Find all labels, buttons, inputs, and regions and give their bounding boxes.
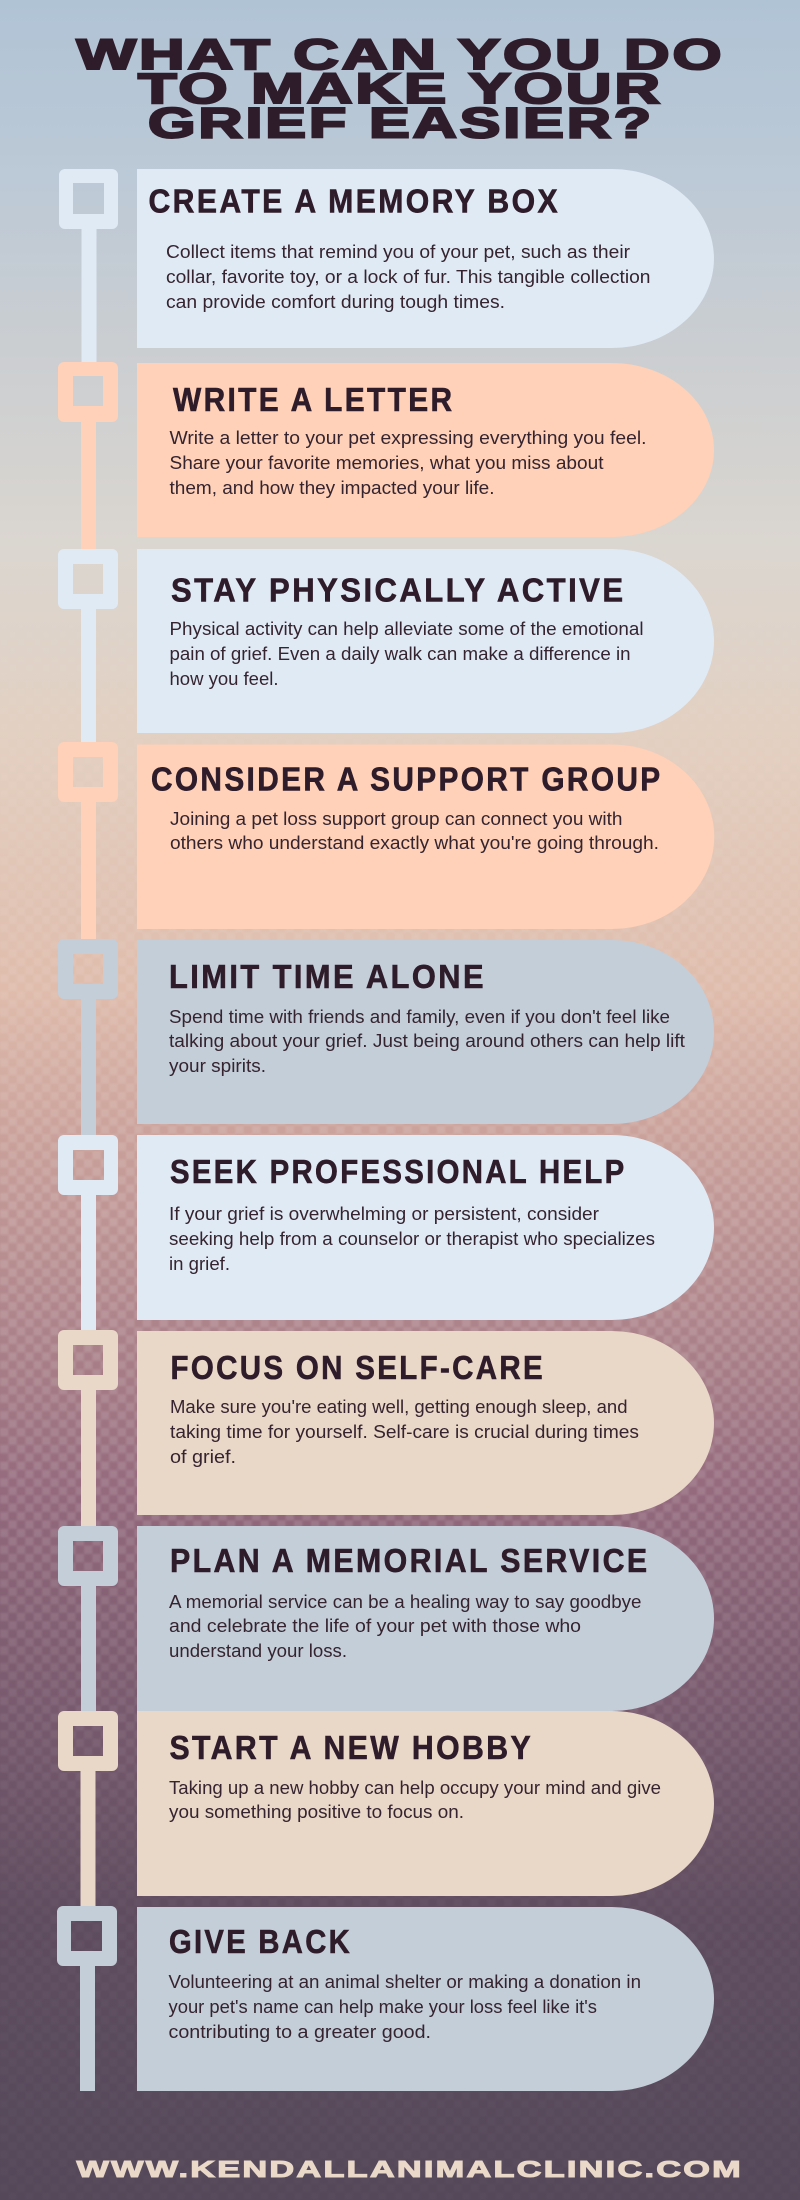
- body text: [169, 1592, 642, 1661]
- panel: focus on self-care: [137, 1331, 714, 1515]
- icon: timeline marker 4: [58, 742, 118, 802]
- heading: PLAN A MEMORIAL SERVICE: [170, 1542, 650, 1579]
- timeline stems: [80, 225, 96, 2091]
- card shape: [137, 549, 714, 733]
- title: GRIEF EASIER?: [148, 100, 654, 148]
- body text: [169, 1778, 661, 1822]
- body text: understand your loss.: [169, 1641, 347, 1661]
- panel: stay physically active: [137, 549, 714, 733]
- body text: Joining a pet loss support group can connect you with: [170, 809, 622, 829]
- body text: [169, 1007, 685, 1076]
- body text: Write a letter to your pet expressing everything you feel.: [170, 428, 646, 448]
- body text: [170, 1397, 639, 1467]
- title: WHAT CAN YOU DO: [76, 31, 724, 79]
- card shape: [137, 1526, 714, 1711]
- icon: timeline marker 6: [58, 1135, 118, 1195]
- icon: timeline marker 5: [58, 939, 118, 999]
- panel: write a letter: [137, 363, 714, 537]
- card shape: [137, 744, 714, 929]
- title: TO MAKE YOUR: [138, 65, 663, 113]
- body text: them, and how they impacted your life.: [170, 478, 494, 498]
- card shape: [137, 1711, 714, 1896]
- body text: Physical activity can help alleviate some of the emotional: [170, 619, 644, 639]
- body text: Spend time with friends and family, even if you don't feel like: [169, 1007, 670, 1027]
- body text: pain of grief. Even a daily walk can make a difference in: [170, 644, 630, 664]
- body text: taking time for yourself. Self-care is crucial during times: [170, 1422, 639, 1442]
- body text: Volunteering at an animal shelter or making a donation in: [168, 1972, 641, 1992]
- heading: FOCUS ON SELF-CARE: [170, 1349, 545, 1386]
- card shape: [137, 363, 714, 537]
- heading: GIVE BACK: [169, 1923, 352, 1960]
- body text: [170, 428, 646, 498]
- panel: seek professional help: [137, 1135, 714, 1320]
- heading: CONSIDER A SUPPORT GROUP: [151, 760, 662, 798]
- card shape: [137, 940, 714, 1124]
- body text: Collect items that remind you of your pet, such as their: [166, 242, 630, 262]
- body text: contributing to a greater good.: [168, 2022, 431, 2042]
- heading: SEEK PROFESSIONAL HELP: [170, 1153, 626, 1190]
- body text: and celebrate the life of your pet with those who: [169, 1616, 581, 1636]
- heading: LIMIT TIME ALONE: [169, 958, 486, 995]
- body text: [166, 242, 650, 312]
- icon: timeline marker 2: [58, 362, 118, 422]
- heading: STAY PHYSICALLY ACTIVE: [171, 572, 626, 608]
- body text: Make sure you're eating well, getting enough sleep, and: [170, 1397, 628, 1417]
- panel: start a new hobby: [137, 1711, 714, 1896]
- icon: timeline marker 1: [59, 169, 118, 229]
- body text: of grief.: [170, 1447, 236, 1467]
- icon: timeline marker 8: [58, 1526, 118, 1586]
- panel: create a memory box: [137, 169, 714, 348]
- body text: [170, 809, 659, 853]
- panel: plan a memorial service: [137, 1526, 714, 1711]
- body text: [168, 1972, 641, 2042]
- body text: can provide comfort during tough times.: [166, 292, 505, 312]
- body text: talking about your grief. Just being around others can help lift: [169, 1031, 685, 1051]
- panel: give back: [137, 1907, 714, 2091]
- heading: CREATE A MEMORY BOX: [148, 182, 560, 220]
- body text: your pet's name can help make your loss feel like it's: [168, 1997, 597, 2017]
- body text: in grief.: [169, 1254, 230, 1274]
- title: [76, 31, 724, 148]
- icon: timeline marker 7: [58, 1330, 118, 1390]
- body text: [170, 619, 644, 689]
- body text: your spirits.: [169, 1056, 266, 1076]
- icon: timeline marker 9: [58, 1711, 118, 1771]
- heading: WRITE A LETTER: [173, 381, 454, 418]
- body text: A memorial service can be a healing way to say goodbye: [169, 1592, 642, 1612]
- heading: START A NEW HOBBY: [170, 1729, 533, 1766]
- panel: limit time alone: [137, 940, 714, 1124]
- body text: collar, favorite toy, or a lock of fur. This tangible collection: [166, 267, 650, 287]
- footer website url: WWW.KENDALLANIMALCLINIC.COM: [76, 2156, 743, 2182]
- body text: Taking up a new hobby can help occupy your mind and give: [169, 1778, 661, 1798]
- card shape: [137, 169, 714, 348]
- card shape: [137, 1907, 714, 2091]
- card shape: [137, 1135, 714, 1320]
- icon: timeline marker 3: [58, 549, 118, 609]
- body text: seeking help from a counselor or therapist who specializes: [169, 1229, 655, 1249]
- panel: consider a support group: [137, 744, 714, 929]
- body text: others who understand exactly what you're going through.: [170, 833, 659, 853]
- icon: timeline marker 10: [57, 1906, 117, 1966]
- body text: you something positive to focus on.: [169, 1802, 464, 1822]
- card shape: [137, 1331, 714, 1515]
- body text: Share your favorite memories, what you miss about: [170, 453, 604, 473]
- body text: If your grief is overwhelming or persistent, consider: [169, 1204, 599, 1224]
- body text: how you feel.: [170, 669, 278, 689]
- body text: [169, 1204, 655, 1274]
